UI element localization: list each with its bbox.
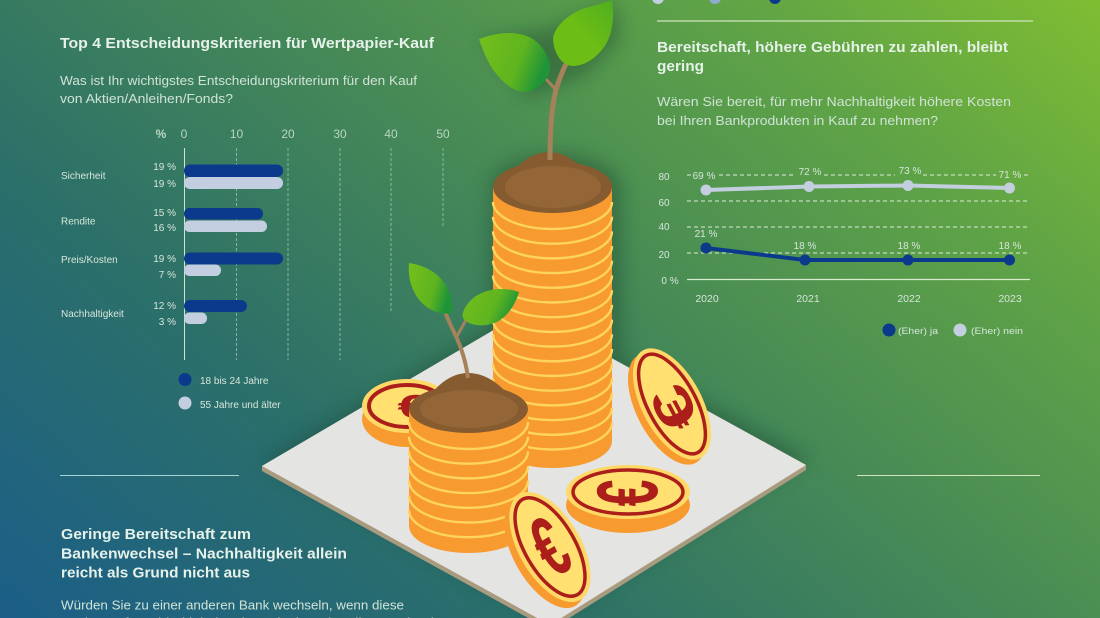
bar chart: criteria by age group: 50 — [436, 127, 450, 141]
series: (Eher) nein — [700, 180, 1015, 196]
line chart: yes and no over years: 2020 — [695, 293, 719, 305]
question text — [657, 95, 1011, 128]
coin: flat centre — [566, 465, 690, 533]
shadow under illustration — [262, 2, 810, 618]
bar chart: criteria by age group: 19 % — [153, 162, 176, 173]
heading: top 4 criteria: Top 4 Entscheidungskriterien für Wertpapier-Kauf — [60, 36, 434, 52]
question text: Würden Sie zu einer anderen Bank wechseln, wenn diese — [61, 598, 404, 612]
legend: yes and no: (Eher) ja — [898, 326, 939, 337]
line chart: yes and no over years: 2022 — [897, 293, 921, 305]
coin: leaning top right: € — [639, 375, 711, 441]
line chart: yes and no over years: 2021 — [796, 293, 820, 305]
bar chart: criteria by age group: 16 % — [153, 223, 176, 234]
bar chart: criteria by age group — [61, 127, 450, 360]
bar chart: criteria by age group: 12 % — [153, 301, 176, 312]
heading: switching banks — [61, 527, 347, 582]
legend: yes and no — [882, 324, 1023, 337]
line chart: yes and no over years: 21 % — [695, 229, 718, 240]
line chart: yes and no over years: 69 % — [693, 171, 716, 182]
line chart: yes and no over years: 18 % — [794, 241, 817, 252]
heading: switching banks: reicht als Grund nicht aus — [61, 566, 250, 582]
illustration: coins and plants on platform — [262, 0, 810, 618]
bar chart: criteria by age group: 40 — [384, 127, 398, 141]
line chart: yes and no over years — [658, 166, 1030, 305]
question text: Was ist Ihr wichtigstes Entscheidungskriterium für den Kauf — [60, 74, 418, 88]
small plant — [409, 263, 519, 378]
leaf right — [553, 0, 613, 66]
panel: low willingness to switch banks — [60, 476, 1040, 618]
legend: age groups: 18 bis 24 Jahre — [200, 376, 269, 387]
coin: flat centre: € — [579, 480, 676, 506]
coin: leaning top right — [612, 336, 727, 477]
heading: switching banks: Geringe Bereitschaft zum — [61, 527, 251, 543]
panel: top 4 decision criteria — [60, 36, 450, 411]
heading: switching banks: Bankenwechsel – Nachhaltigkeit allein — [61, 546, 347, 562]
bar chart: criteria by age group: 0 — [181, 127, 188, 141]
legend: yes and no: (Eher) nein — [971, 326, 1023, 337]
line chart: yes and no over years: 2023 — [998, 293, 1022, 305]
bar chart: criteria by age group: 15 % — [153, 208, 176, 219]
bar chart: criteria by age group: 19 % — [153, 179, 176, 190]
bar chart: criteria by age group: 30 — [333, 127, 347, 141]
panel: willingness to pay higher fees — [652, 0, 1033, 337]
line chart: yes and no over years: 18 % — [898, 241, 921, 252]
cropped legend at top edge — [652, 0, 781, 4]
line chart: yes and no over years: 0 % — [661, 276, 679, 287]
small leaf right — [463, 289, 519, 325]
question text — [61, 598, 446, 618]
bar chart: criteria by age group: 3 % — [159, 317, 176, 328]
tall coin stack — [493, 152, 612, 468]
question text: von Aktien/Anleihen/Fonds? — [60, 92, 233, 106]
line chart: yes and no over years: 20 — [658, 250, 670, 261]
legend: age groups: 55 Jahre und älter — [200, 400, 281, 411]
leaf left — [479, 33, 550, 92]
legend: age groups — [178, 373, 281, 411]
bar chart: criteria by age group: Nachhaltigkeit — [61, 309, 124, 320]
bar chart: criteria by age group: Sicherheit — [61, 171, 106, 182]
bar chart: criteria by age group: 7 % — [159, 270, 176, 281]
bar chart: criteria by age group: Preis/Kosten — [61, 255, 118, 266]
large plant — [479, 0, 613, 160]
small leaf left — [409, 263, 453, 314]
bar chart: criteria by age group: Rendite — [61, 216, 96, 228]
line chart: yes and no over years: 80 — [658, 172, 670, 183]
question text — [60, 74, 418, 106]
platform — [262, 311, 806, 618]
line chart: yes and no over years: 18 % — [999, 241, 1022, 252]
series: (Eher) ja — [700, 242, 1015, 266]
bar chart: criteria by age group: 20 — [281, 127, 295, 141]
bar chart: criteria by age group: % — [156, 127, 167, 141]
bar chart: criteria by age group: 10 — [230, 127, 243, 141]
heading: fees: gering — [657, 59, 704, 75]
coin: leaning front: € — [514, 498, 585, 595]
coin: flat behind small stack: € — [397, 389, 431, 425]
line chart: yes and no over years: 73 % — [899, 166, 922, 177]
coin: leaning front — [488, 479, 607, 618]
line chart: yes and no over years: 60 — [658, 198, 670, 209]
bar chart: criteria by age group: 19 % — [153, 254, 176, 265]
line chart: yes and no over years: 71 % — [999, 170, 1022, 181]
coin: flat behind small stack — [362, 379, 452, 447]
heading: fees: Bereitschaft, höhere Gebühren zu zahlen, bleibt — [657, 40, 1008, 56]
line chart: yes and no over years: 72 % — [799, 167, 822, 178]
question text: bei Ihren Bankprodukten in Kauf zu nehmen? — [657, 114, 938, 128]
heading: fees — [657, 40, 1008, 75]
question text: Wären Sie bereit, für mehr Nachhaltigkeit höhere Kosten — [657, 95, 1011, 109]
small coin stack — [409, 373, 528, 553]
line chart: yes and no over years: 40 — [658, 222, 670, 233]
